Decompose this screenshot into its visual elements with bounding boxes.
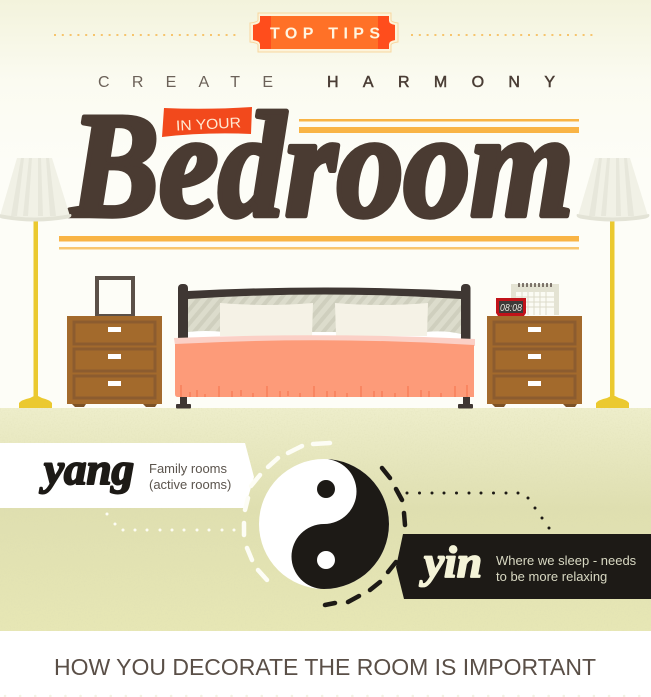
right floor lamp bbox=[577, 158, 649, 408]
section heading: HOW YOU DECORATE THE ROOM IS IMPORTANT bbox=[54, 654, 596, 680]
bottom white section bbox=[0, 631, 651, 697]
subtitle: create harmony: HARMONY bbox=[327, 74, 555, 91]
right pillow bbox=[335, 303, 428, 336]
title stripes upper bbox=[299, 119, 579, 133]
top tips badge bbox=[250, 13, 398, 52]
in your flag: IN YOUR bbox=[176, 115, 241, 135]
bed bbox=[174, 284, 475, 408]
top tips badge: TOP TIPS bbox=[270, 26, 380, 42]
left floor lamp bbox=[0, 158, 71, 408]
yang banner: Family rooms bbox=[149, 461, 228, 476]
yin yang symbol bbox=[259, 459, 389, 589]
yin banner: Where we sleep - needs bbox=[496, 553, 637, 568]
left pillow bbox=[220, 303, 313, 336]
top dotted rule right bbox=[411, 34, 594, 36]
red alarm clock: 08:08 bbox=[500, 303, 522, 314]
yang banner: yang bbox=[39, 445, 134, 494]
yang dotted leader bbox=[106, 512, 236, 532]
yin dotted leader bbox=[406, 492, 550, 530]
yang banner bbox=[0, 443, 254, 508]
yin banner: yin bbox=[419, 538, 482, 587]
title stripes lower bbox=[59, 236, 579, 250]
yin banner: to be more relaxing bbox=[496, 569, 607, 584]
yang banner: (active rooms) bbox=[149, 477, 231, 492]
calendar bbox=[511, 283, 559, 315]
picture frame bbox=[97, 278, 133, 316]
title: Bedroom: Bedroom bbox=[68, 82, 574, 248]
right nightstand bbox=[487, 316, 582, 407]
in your flag bbox=[162, 107, 252, 137]
subtitle: create harmony: CREATE bbox=[98, 74, 273, 91]
faint dotted rule bbox=[5, 695, 651, 697]
floor band bbox=[0, 408, 651, 631]
black dashed ring bbox=[325, 468, 405, 605]
white dashed ring bbox=[244, 443, 330, 580]
left nightstand bbox=[67, 316, 162, 407]
subtitle: create harmony bbox=[98, 74, 555, 91]
top dotted rule left bbox=[54, 34, 237, 36]
yin banner bbox=[396, 534, 651, 599]
background wall bbox=[0, 0, 651, 408]
red alarm clock bbox=[496, 298, 526, 316]
